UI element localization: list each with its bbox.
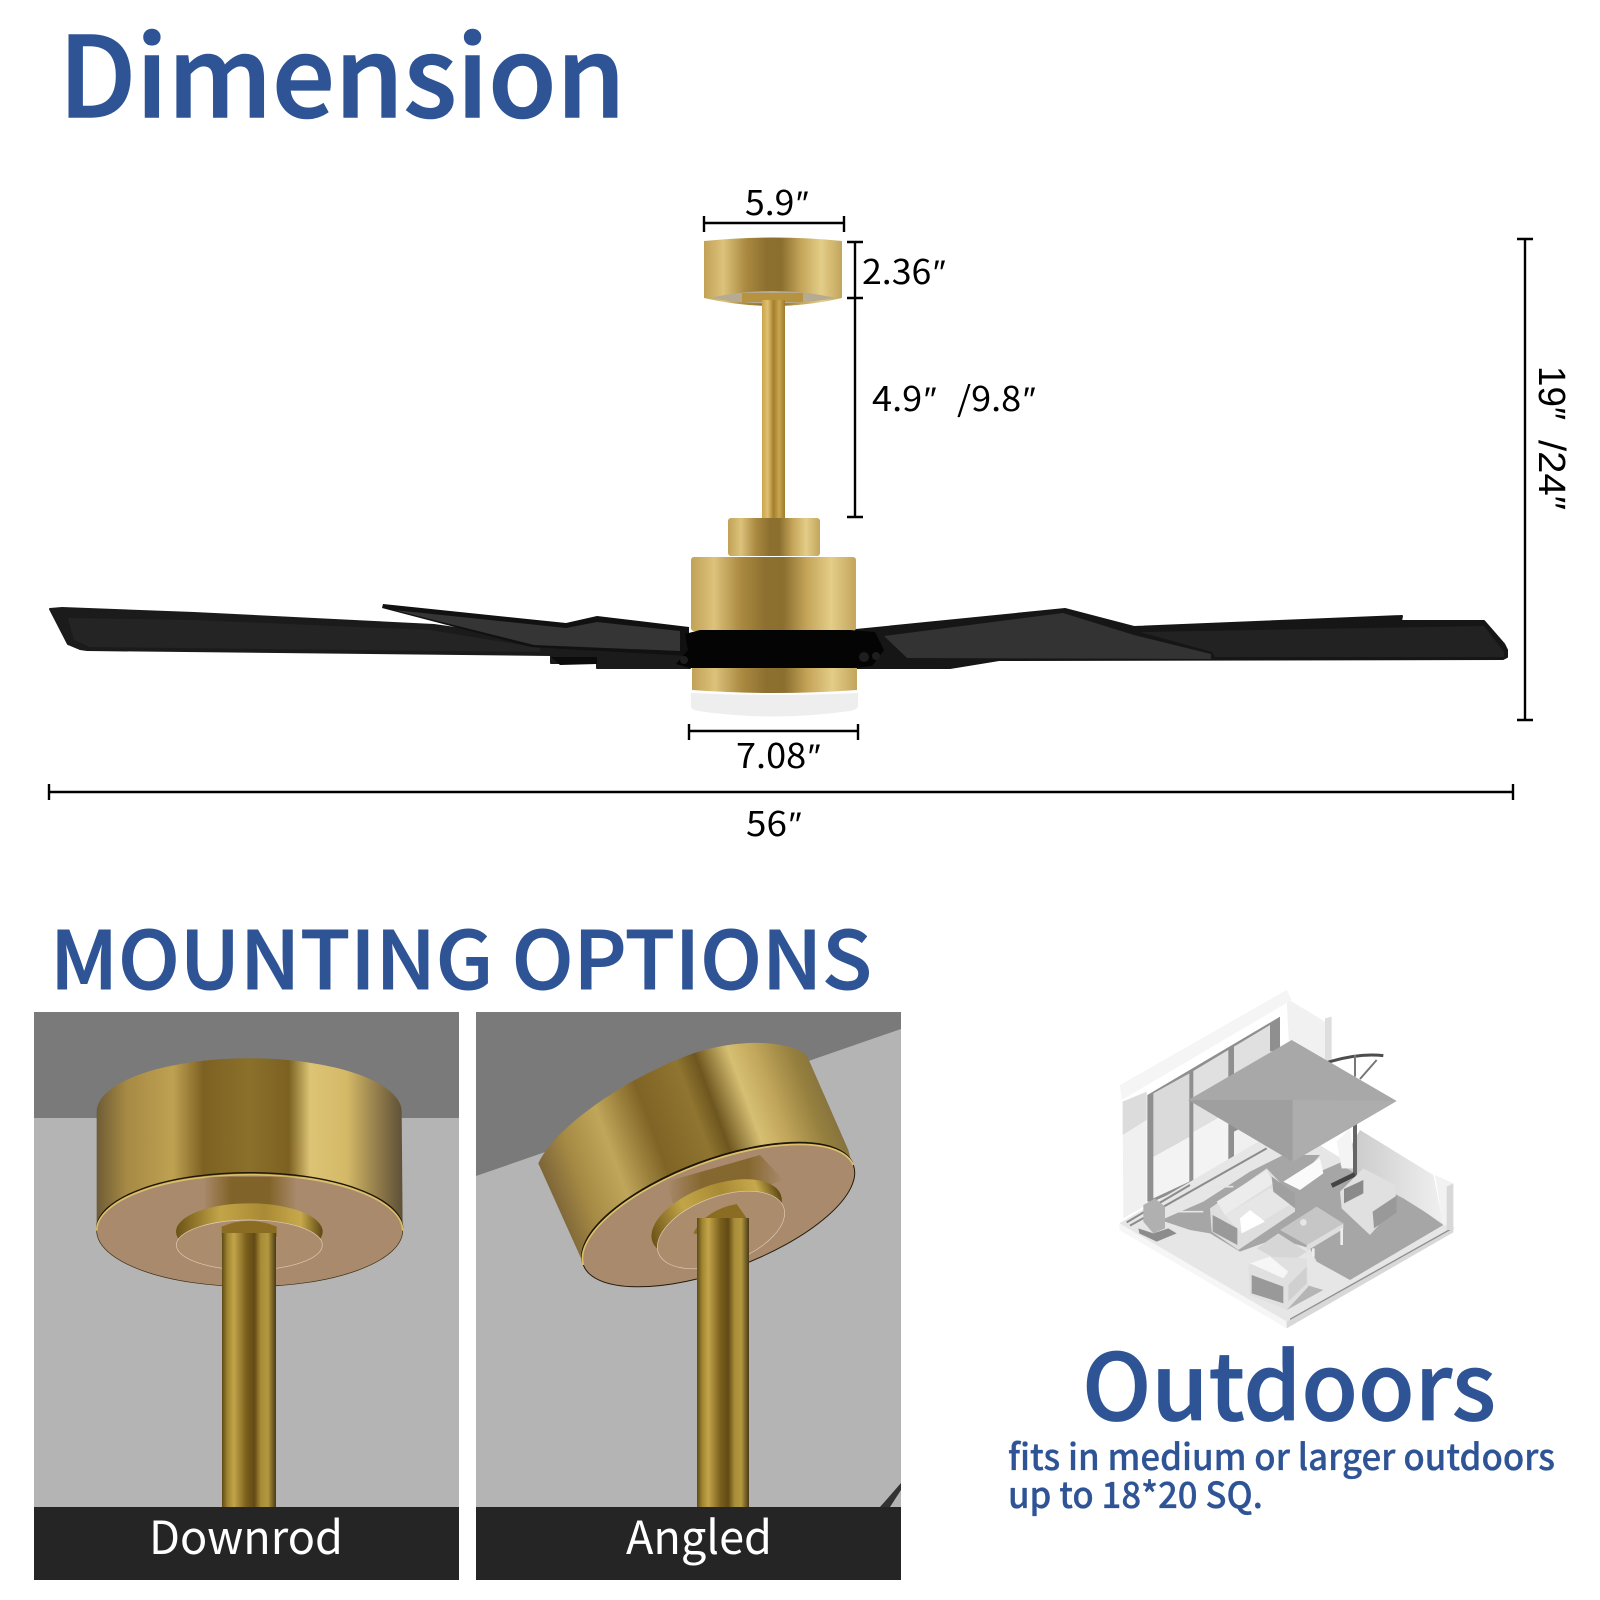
armchair right	[1340, 1168, 1397, 1235]
downrod	[762, 300, 785, 519]
dimension: housing width 7.08: 7.08″	[736, 729, 820, 778]
heading: Outdoors: Outdoors	[1082, 1314, 1496, 1447]
dimension: overall height 19/24: /24″	[1530, 440, 1572, 510]
dimension: canopy width 5.9: 5.9″	[745, 176, 808, 225]
right wall	[1337, 1128, 1453, 1230]
umbrella base	[1138, 1198, 1177, 1242]
umbrella	[1188, 1040, 1397, 1186]
dimension: downrod length: /9.8″	[957, 372, 1035, 421]
product diagram: ceiling fan with dimensions	[49, 176, 1572, 846]
floor	[1119, 1125, 1453, 1328]
fan blades	[50, 604, 1507, 668]
dimension: downrod length	[847, 298, 1035, 517]
label: Downrod	[34, 1502, 459, 1580]
ceiling canopy	[704, 238, 842, 306]
dimension: canopy height 2.36: 2.36″	[862, 245, 945, 294]
sofa	[1210, 1168, 1295, 1250]
text: outdoors description: fits in medium or larger outdoors	[1008, 1429, 1555, 1481]
motor housing	[676, 518, 884, 716]
dimension: canopy width 5.9	[704, 176, 844, 232]
text: outdoors description	[1008, 1429, 1555, 1519]
wall and windows	[1120, 990, 1332, 1218]
canopy photo: angled	[538, 1043, 872, 1317]
dimension: downrod length: 4.9″	[872, 372, 936, 421]
dimension: overall height 19/24	[1517, 239, 1572, 720]
dimension: span 56: 56″	[746, 797, 801, 846]
armchair front	[1248, 1257, 1308, 1310]
icon: isometric outdoor patio	[1119, 990, 1453, 1328]
heading: mounting options: MOUNTING OPTIONS	[50, 897, 872, 1013]
label: Downrod: Downrod	[149, 1502, 343, 1568]
dimension: span 56	[49, 784, 1513, 846]
panel: angled mount	[476, 1012, 901, 1580]
canopy photo: downrod	[97, 1058, 403, 1287]
rod: downrod	[222, 1233, 276, 1507]
rod: angled	[697, 1218, 749, 1507]
panel: downrod mount	[34, 1012, 459, 1580]
dimension: housing width 7.08	[689, 724, 858, 778]
text: outdoors description: up to 18*20 SQ.	[1008, 1467, 1263, 1519]
table and ottoman	[1257, 1207, 1343, 1265]
label: Angled: Angled	[626, 1502, 772, 1568]
label: Angled	[476, 1502, 901, 1580]
dimension: overall height 19/24: 19″	[1530, 366, 1572, 420]
